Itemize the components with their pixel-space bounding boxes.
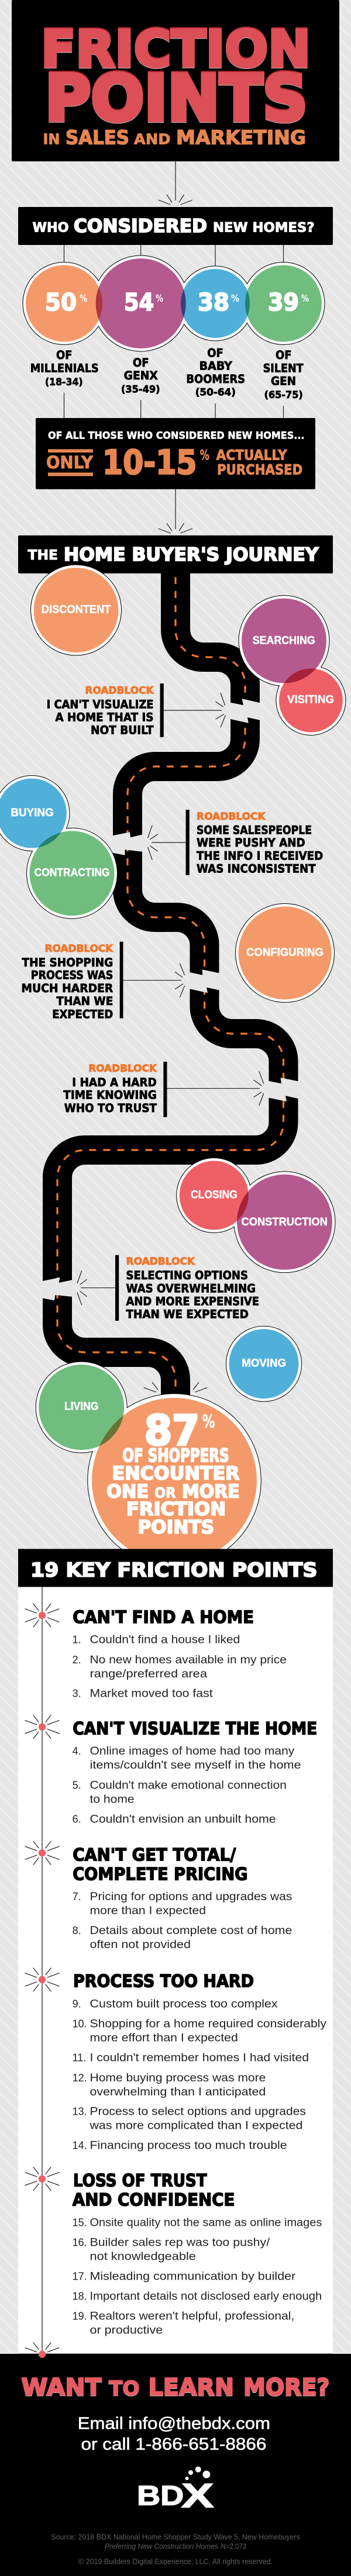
text: encounter friction points: OF SHOPPERS — [123, 1445, 229, 1466]
section: loss of trust and confidence — [73, 2170, 322, 2337]
callout: roadblock 3: MUCH HARDER — [21, 982, 113, 995]
heading: want to learn more: WANT — [21, 2374, 102, 2401]
section: process too hard: Custom built process too complex — [90, 1998, 278, 2010]
text: source and copyright — [51, 2533, 300, 2566]
section: can't get total complete pricing — [73, 1845, 292, 1951]
section: loss of trust and confidence: 19. — [73, 2310, 87, 2322]
section: can't visualize the home: 6. — [73, 1813, 81, 1825]
section: process too hard: Shopping for a home required considerably — [90, 2018, 327, 2031]
section: loss of trust and confidence: LOSS OF TRUST — [73, 2170, 207, 2190]
subtitle — [43, 126, 306, 149]
callout: roadblock 2: WAS INCONSISTENT — [197, 862, 316, 875]
callout: roadblock 4: ROADBLOCK — [88, 1063, 157, 1075]
callout: roadblock 4: TIME KNOWING — [63, 1089, 157, 1102]
callout: roadblock 3: THAN WE — [56, 995, 113, 1008]
panel: footer — [0, 2350, 351, 2576]
text: encounter friction points: ONE — [106, 1481, 149, 1502]
stage: configuring — [235, 903, 335, 1003]
label: baby boomers: BABY — [199, 359, 233, 373]
section: can't find a home: range/preferred area — [90, 1668, 207, 1680]
section: loss of trust and confidence: Realtors weren't helpful, professional, — [90, 2310, 294, 2322]
section: can't get total complete pricing: COMPLETE PRICING — [73, 1864, 247, 1884]
callout: roadblock 5: AND MORE EXPENSIVE — [126, 1294, 259, 1308]
label: millenials: MILLENIALS — [30, 361, 99, 375]
subtitle: SALES — [66, 126, 129, 149]
stat: 39 percent: 39 — [268, 288, 299, 316]
section: can't visualize the home — [73, 1719, 317, 1825]
road: winding journey — [42, 570, 299, 1400]
panel: home buyer's journey heading — [18, 536, 333, 574]
stages: buying and contracting: BUYING — [11, 807, 54, 819]
label: baby boomers: OF — [207, 346, 223, 360]
stat: 54 percent: 54 — [124, 288, 154, 316]
section: can't visualize the home: Couldn't make emotional connection — [90, 1779, 287, 1791]
callout: roadblock 2: THE INFO I RECEIVED — [197, 849, 323, 862]
text: source and copyright: © 2019 Builders Digital Experience, LLC. All rights reserved. — [78, 2558, 273, 2566]
label: baby boomers: (50-64) — [195, 387, 236, 399]
callout: roadblock 3: EXPECTED — [52, 1007, 113, 1021]
section: can't get total complete pricing: 8. — [73, 1925, 81, 1936]
panel: title — [12, 0, 339, 161]
panel: friction points list background — [18, 1587, 333, 2354]
callout: roadblock 5: ROADBLOCK — [126, 1256, 195, 1268]
text: contact details — [78, 2414, 270, 2454]
panel: only 10-15 percent purchased — [36, 418, 315, 489]
stage: moving: MOVING — [242, 1358, 286, 1370]
section: can't visualize the home: 5. — [73, 1779, 81, 1791]
label: silent gen: GEN — [271, 375, 296, 388]
stages: buying and contracting — [0, 775, 118, 919]
title: friction points: FRICTION — [41, 20, 311, 78]
text: contact details: Email info@thebdx.com — [78, 2414, 270, 2433]
text: encounter friction points: ENCOUNTER — [112, 1463, 240, 1484]
panel: only 10-15 percent purchased: OF ALL THOSE WHO CONSIDERED NEW HOMES... — [48, 430, 304, 441]
section: can't find a home: No new homes available in my price — [90, 1654, 287, 1666]
panel: who considered new homes: NEW HOMES? — [213, 221, 315, 235]
section: process too hard: Process to select options and upgrades — [90, 2106, 306, 2118]
stage: moving — [226, 1326, 302, 1402]
section: can't find a home: Couldn't find a house I liked — [90, 1634, 240, 1646]
text: source and copyright: Source: 2018 BDX National Home Shopper Study Wave 5, New Homebuyers — [51, 2533, 300, 2541]
section: can't get total complete pricing: Pricing for options and upgrades was — [90, 1891, 292, 1903]
section: process too hard: 13. — [73, 2106, 87, 2118]
panel: only 10-15 percent purchased: ACTUALLY — [216, 447, 287, 463]
section: can't find a home — [73, 1607, 287, 1700]
section: can't find a home: 3. — [73, 1688, 81, 1700]
text: source and copyright: N=2,073 — [221, 2542, 246, 2550]
logo: BDX: BD — [137, 2480, 184, 2511]
text: contact details: or call 1-866-651-8866 — [81, 2435, 266, 2454]
callout: roadblock 1: I CAN'T VISUALIZE — [47, 697, 153, 711]
stat: 50 percent: % — [80, 293, 87, 305]
label: genx: OF — [133, 356, 149, 370]
callout: roadblock 2 — [148, 810, 323, 875]
stage: discontent — [30, 565, 122, 656]
subtitle: AND — [134, 131, 171, 147]
stat: 38 percent: % — [231, 293, 239, 305]
subtitle: IN — [43, 131, 60, 147]
stages: closing and construction: CONSTRUCTION — [241, 1216, 328, 1228]
callout: roadblock 4: WHO TO TRUST — [64, 1101, 157, 1115]
section: loss of trust and confidence: AND CONFIDENCE — [73, 2190, 235, 2210]
connector: purchase panel to journey — [158, 489, 192, 533]
section: loss of trust and confidence: Misleading communication by builder — [90, 2270, 296, 2283]
subtitle: MARKETING — [176, 126, 306, 149]
label: millenials — [30, 348, 99, 388]
label: baby boomers: BOOMERS — [186, 372, 245, 386]
panel: only 10-15 percent purchased: 10-15 — [102, 443, 197, 482]
label: genx: (35-49) — [121, 384, 160, 395]
section: process too hard: I couldn't remember homes I had visited — [90, 2052, 309, 2064]
section: can't get total complete pricing: often not provided — [90, 1939, 191, 1951]
callout: roadblock 5 — [77, 1255, 259, 1321]
panel: only 10-15 percent purchased: % — [200, 447, 209, 464]
section: process too hard: 9. — [73, 1998, 81, 2009]
section: loss of trust and confidence: Onsite quality not the same as online images — [90, 2216, 322, 2229]
section: process too hard: overwhelming than I anticipated — [90, 2086, 266, 2098]
icon: burst 4 — [25, 1968, 60, 1991]
callout: roadblock 3: THE SHOPPING — [22, 956, 113, 969]
section: can't visualize the home: 4. — [73, 1745, 81, 1757]
section: can't visualize the home: Couldn't envision an unbuilt home — [90, 1813, 276, 1825]
label: millenials: OF — [56, 348, 73, 362]
callout: roadblock 2: WERE PUSHY AND — [197, 836, 305, 850]
heading: want to learn more: TO — [109, 2377, 140, 2401]
stages: searching and visiting: VISITING — [287, 694, 334, 706]
section: can't get total complete pricing: Details about complete cost of home — [90, 1925, 292, 1937]
panel: home buyer's journey heading: THE — [28, 548, 58, 563]
section: process too hard — [73, 1971, 327, 2152]
section: can't visualize the home: Online images of home had too many — [90, 1745, 295, 1757]
section: can't find a home: 1. — [73, 1634, 81, 1646]
title: friction points — [41, 20, 311, 136]
section: process too hard: PROCESS TOO HARD — [73, 1971, 254, 1991]
callout: roadblock 3: PROCESS WAS — [31, 969, 113, 982]
section: loss of trust and confidence: not knowledgeable — [90, 2251, 196, 2263]
heading: want to learn more — [21, 2374, 330, 2401]
section: process too hard: 10. — [73, 2018, 87, 2030]
section: process too hard: Home buying process was more — [90, 2072, 266, 2084]
section: can't find a home: Market moved too fast — [90, 1688, 213, 1700]
title: friction points: POINTS — [45, 62, 308, 136]
icon: burst 2 — [25, 1715, 60, 1739]
stat: 38 percent: 38 — [198, 288, 229, 316]
stat: 87 percent: % — [202, 1412, 215, 1432]
section: loss of trust and confidence: 15. — [73, 2216, 87, 2228]
section: loss of trust and confidence: Important details not disclosed early enough — [90, 2290, 322, 2302]
section: loss of trust and confidence: or productive — [90, 2325, 163, 2337]
callout: roadblock 1: A HOME THAT IS — [55, 711, 153, 724]
stat circles: living and 87 percent of shoppers — [36, 1361, 261, 1567]
callout: roadblock 3: ROADBLOCK — [44, 943, 113, 955]
icon: burst 1 — [25, 1604, 60, 1627]
panel: home buyer's journey heading: HOME BUYER'S JOURNEY — [64, 544, 319, 565]
section: can't visualize the home: to home — [90, 1793, 135, 1805]
panel: only 10-15 percent purchased: ONLY — [46, 453, 94, 472]
callout: roadblock 1 — [47, 683, 225, 737]
section: loss of trust and confidence: 17. — [73, 2270, 87, 2282]
callout: roadblock 1: NOT BUILT — [91, 724, 154, 737]
stat: 39 percent: % — [301, 293, 309, 305]
text: encounter friction points: FRICTION — [126, 1499, 226, 1520]
stages: buying and contracting: CONTRACTING — [35, 866, 109, 879]
callout: roadblock 5: THAN WE EXPECTED — [126, 1307, 249, 1321]
stat circles: living and 87 percent of shoppers: LIVING — [64, 1401, 98, 1413]
text: encounter friction points: POINTS — [138, 1517, 214, 1538]
label: millenials: (18-34) — [45, 377, 83, 388]
section: loss of trust and confidence: Builder sales rep was too pushy/ — [90, 2237, 270, 2249]
logo: BDX — [137, 2467, 214, 2515]
section: process too hard: 14. — [73, 2140, 87, 2152]
callout: roadblock 4: I HAD A HARD — [72, 1076, 157, 1089]
chart: generation circles — [22, 255, 325, 352]
connector stems: question to circles — [64, 245, 283, 267]
callout: roadblock 5: WAS OVERWHELMING — [126, 1282, 256, 1295]
section: can't visualize the home: items/couldn't see myself in the home — [90, 1759, 301, 1772]
label: silent gen: SILENT — [263, 361, 304, 375]
panel: 19 key friction points heading: 19 KEY FRICTION POINTS — [30, 1558, 317, 1581]
icon: burst 5 — [25, 2167, 60, 2191]
label: genx: GENX — [124, 369, 158, 382]
text: encounter friction points — [106, 1445, 240, 1538]
panel: who considered new homes — [18, 207, 333, 245]
section: can't find a home: 2. — [73, 1654, 81, 1666]
stat: 54 percent: % — [156, 293, 163, 305]
logo: BDX: X — [181, 2477, 214, 2515]
section: loss of trust and confidence: 16. — [73, 2237, 87, 2249]
burst: road end — [144, 1382, 207, 1392]
callout: roadblock 1: ROADBLOCK — [85, 685, 154, 696]
stat: 87 percent: 87 — [144, 1407, 199, 1455]
section: process too hard: 11. — [73, 2052, 86, 2064]
stages: closing and construction: CLOSING — [191, 1189, 238, 1201]
section: process too hard: more effort than I expected — [90, 2032, 238, 2045]
section: loss of trust and confidence: 18. — [73, 2290, 87, 2302]
text: source and copyright: Preferring New Construction Homes — [105, 2542, 218, 2550]
section: can't get total complete pricing: 7. — [73, 1891, 81, 1902]
section: process too hard: was more complicated than I expected — [89, 2120, 302, 2132]
panel: 19 key friction points heading — [18, 1549, 333, 1587]
stat: 50 percent: 50 — [45, 288, 77, 316]
stages: searching and visiting — [239, 595, 346, 735]
section: process too hard: Financing process too much trouble — [90, 2140, 287, 2152]
callout: roadblock 5: SELECTING OPTIONS — [126, 1269, 248, 1282]
callout: roadblock 2: ROADBLOCK — [197, 811, 266, 823]
section: process too hard: 12. — [73, 2072, 87, 2084]
label: genx — [121, 356, 160, 395]
label: baby boomers — [186, 346, 245, 399]
panel: who considered new homes: CONSIDERED — [74, 216, 207, 237]
text: encounter friction points: OR — [154, 1485, 176, 1501]
stages: searching and visiting: SEARCHING — [253, 635, 315, 647]
text: encounter friction points: MORE — [182, 1481, 240, 1502]
connector stems: labels to panel — [64, 393, 283, 418]
callout: roadblock 3 — [21, 942, 185, 1021]
connector: title to question — [158, 161, 192, 205]
heading: want to learn more: LEARN — [149, 2374, 234, 2401]
section: can't visualize the home: CAN'T VISUALIZE THE HOME — [73, 1719, 317, 1739]
label: silent gen: OF — [276, 348, 291, 362]
stage: discontent: DISCONTENT — [42, 603, 111, 616]
label: silent gen — [263, 348, 304, 401]
panel: only 10-15 percent purchased: PURCHASED — [217, 461, 302, 478]
section: can't get total complete pricing: CAN'T GET TOTAL/ — [73, 1845, 236, 1865]
callout: roadblock 4 — [63, 1062, 264, 1117]
stages: closing and construction — [176, 1158, 336, 1273]
icon: burst 6 — [25, 2342, 60, 2352]
label: silent gen: (65-75) — [264, 389, 303, 401]
panel: who considered new homes: WHO — [33, 221, 69, 235]
stage: configuring: CONFIGURING — [246, 947, 324, 959]
icon: burst 3 — [25, 1841, 60, 1865]
section: can't find a home: CAN'T FIND A HOME — [73, 1607, 254, 1627]
section: can't get total complete pricing: more than I expected — [90, 1905, 206, 1917]
callout: roadblock 2: SOME SALESPEOPLE — [197, 823, 312, 837]
heading: want to learn more: MORE? — [243, 2374, 330, 2401]
